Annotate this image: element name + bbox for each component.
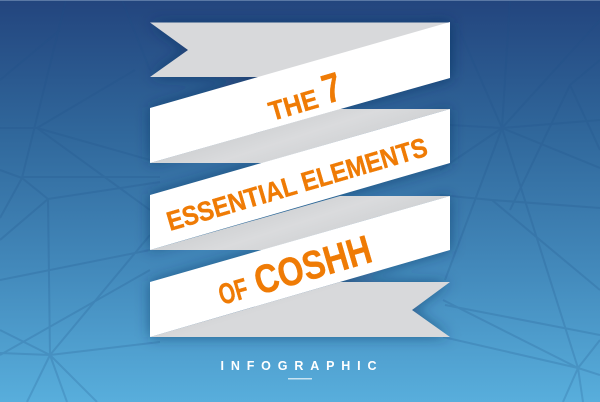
title: THE 7 [265, 63, 347, 127]
white ribbon band 1 [150, 22, 450, 163]
ribbon fold: bottom tail [150, 282, 450, 337]
title: THE 7: 7 [317, 63, 347, 113]
subtitle: INFOGRAPHIC: INFOGRAPHIC [220, 359, 376, 373]
title: OF COSHH: COSHH [249, 228, 377, 304]
ribbon drop shadows [150, 22, 450, 337]
ribbon fold: second [150, 109, 450, 163]
title: THE 7: THE [265, 84, 322, 127]
white ribbon band 2 [150, 109, 450, 250]
top edge highlight [0, 0, 600, 1]
white ribbon band 3 [150, 196, 450, 337]
title: OF COSHH: OF [215, 273, 252, 312]
ribbon fold: third [150, 196, 450, 250]
title: OF COSHH [215, 228, 377, 312]
subtitle underline [288, 378, 312, 380]
ribbon fold: top tail [150, 22, 450, 77]
title: ESSENTIAL ELEMENTS: ESSENTIAL ELEMENTS [163, 132, 431, 237]
